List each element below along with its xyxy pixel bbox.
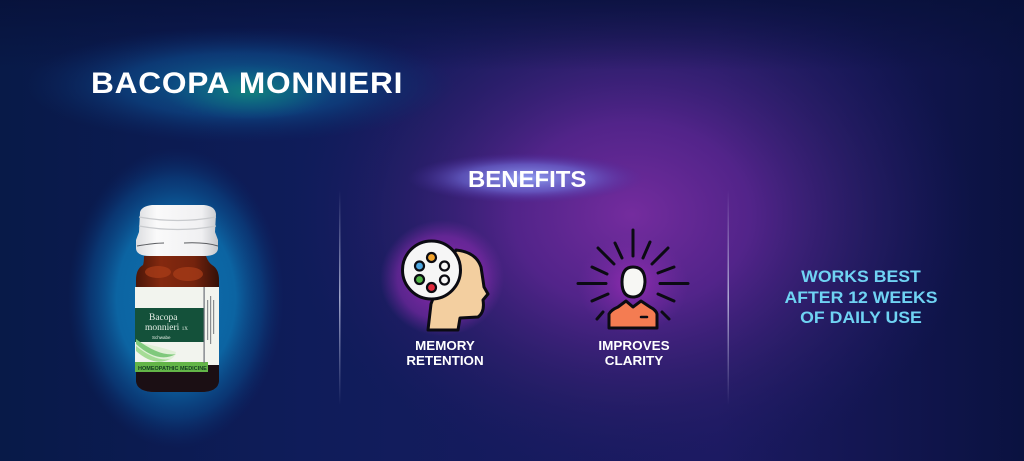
- callout: usage note: [784, 268, 938, 327]
- icon: medicine bottle: HOMEOPATHIC MEDICINE: [138, 366, 207, 372]
- label: improves clarity: CLARITY: [605, 354, 663, 368]
- title: BACOPA MONNIERI: [91, 67, 403, 100]
- icon: person with clarity rays: [576, 228, 690, 330]
- callout: usage note: WORKS BEST: [801, 268, 921, 286]
- label: improves clarity: [598, 339, 670, 368]
- callout: usage note: AFTER 12 WEEKS: [784, 288, 938, 306]
- icon: medicine bottle: [135, 205, 219, 392]
- icon: medicine bottle: Bacopa: [149, 313, 178, 323]
- callout: usage note: OF DAILY USE: [800, 309, 922, 327]
- heading: benefits: BENEFITS: [468, 166, 586, 192]
- icon: medicine bottle: monnieri 1X: [145, 323, 188, 333]
- icon: head with memory circle: [382, 223, 500, 334]
- label: memory retention: MEMORY: [415, 339, 475, 353]
- label: memory retention: RETENTION: [406, 354, 484, 368]
- label: memory retention: [406, 339, 484, 368]
- icon: medicine bottle: Schwabe: [152, 335, 171, 340]
- label: improves clarity: IMPROVES: [598, 339, 670, 353]
